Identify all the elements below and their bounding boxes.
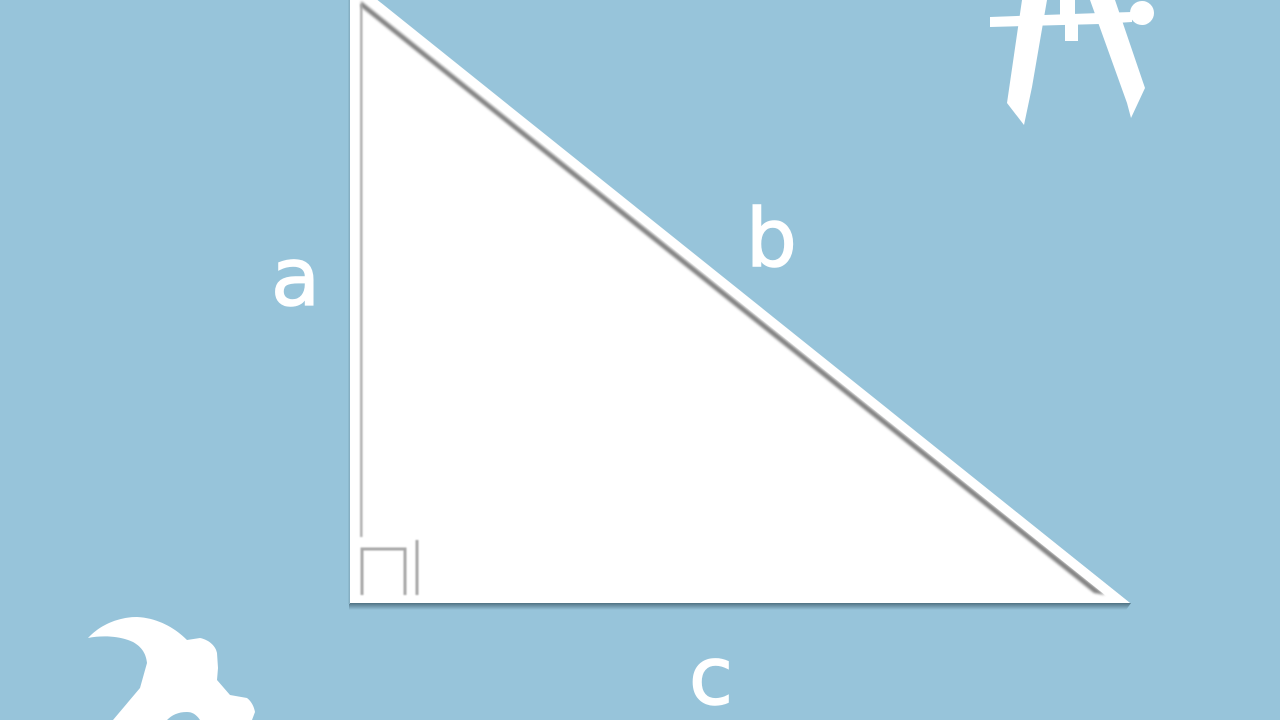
triangle body — [350, 0, 1130, 603]
shadow under base — [349, 603, 1131, 610]
right triangle — [348, 0, 1131, 610]
icon: hammer — [88, 617, 255, 720]
shadow along left edge — [348, 0, 350, 604]
label b: b — [746, 192, 797, 285]
inner shadow along hypotenuse — [361, 1, 1105, 595]
inner shadow along left side — [360, 4, 363, 537]
right angle marker — [362, 540, 418, 595]
crisp white rim along hypotenuse — [361, 0, 1130, 603]
icon: compass — [990, 0, 1154, 125]
label a: a — [271, 231, 320, 324]
